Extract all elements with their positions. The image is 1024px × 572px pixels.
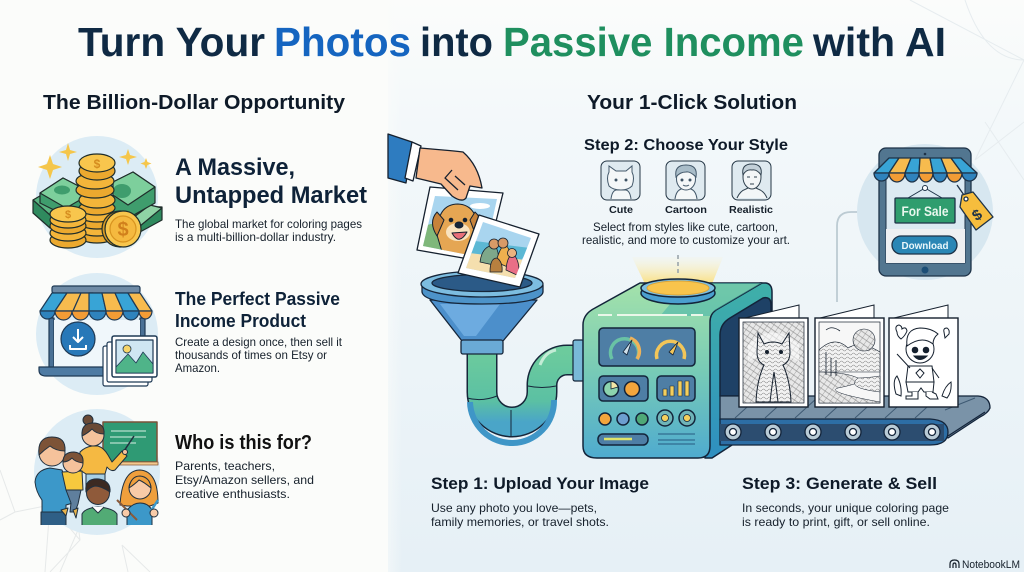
- heading: Your 1-Click Solution: Your 1-Click Solution: [587, 92, 797, 114]
- text: Step 3 Generate and Sell: Step 3: Generate & Sell: [742, 474, 937, 493]
- coloring page: cat: [739, 305, 808, 407]
- coloring page: landscape: [815, 305, 884, 407]
- text: The Perfect Passive Income Product: thousands of times on Etsy or: [175, 348, 327, 362]
- text: The Perfect Passive Income Product: [175, 289, 343, 375]
- text: A Massive, Untapped Market: [175, 154, 367, 244]
- title: [78, 19, 946, 65]
- text: Step 1 Upload Your Image: Step 1: Upload Your Image: [431, 474, 649, 493]
- text: style description: realistic, and more to customize your art.: [582, 233, 790, 247]
- icon: hand holding photos: [388, 134, 539, 287]
- text: Step 1 Upload Your Image: family memories, or travel shots.: [431, 515, 609, 529]
- icon: tablet storefront: For Sale: [902, 204, 949, 219]
- label: Cartoon: Cartoon: [665, 204, 707, 216]
- icon: tablet storefront: [857, 144, 993, 280]
- icon: realistic style: [732, 161, 771, 200]
- icon: storefront laptop with photos: [36, 273, 158, 395]
- text: Step 1 Upload Your Image: Use any photo you love—pets,: [431, 501, 597, 515]
- label: Cute: Cute: [609, 204, 633, 216]
- icon: money and coins: $: [94, 157, 101, 171]
- label: Realistic: Realistic: [729, 204, 773, 216]
- icon: cartoon style: [666, 161, 705, 200]
- heading: Step 2 Choose Your Style: Step 2: Choose Your Style: [584, 137, 788, 154]
- text: Who is this for?: creative enthusiasts.: [175, 487, 290, 501]
- text: A Massive, Untapped Market: is a multi-billion-dollar industry.: [175, 230, 336, 244]
- text: Who is this for?: [175, 432, 314, 501]
- heading: The Billion-Dollar Opportunity: The Billion-Dollar Opportunity: [43, 92, 346, 114]
- text: Step 3 Generate and Sell: [742, 474, 949, 529]
- text: Step 3 Generate and Sell: is ready to print, gift, or sell online.: [742, 515, 930, 529]
- icon: arrow to storefront: [837, 205, 874, 302]
- icon: tablet storefront: $: [969, 206, 986, 225]
- icon: money and coins: $: [117, 219, 129, 241]
- icon: parents, teachers and creatives: [34, 409, 160, 535]
- text: A Massive, Untapped Market: The global market for coloring pages: [175, 217, 362, 231]
- icon: pipe: [467, 340, 584, 443]
- icon: cute style: [601, 161, 640, 200]
- title: Passive Income: [503, 19, 804, 65]
- text: style description: Select from styles like cute, cartoon,: [593, 220, 778, 234]
- icon: funnel: [421, 271, 543, 354]
- icon: light beam and dashed connector: [632, 255, 723, 284]
- text: The Perfect Passive Income Product: Amazon.: [175, 361, 220, 375]
- title: with AI: [812, 19, 946, 65]
- text: A Massive, Untapped Market: Untapped Market: [175, 182, 367, 209]
- text: Step 1 Upload Your Image: [431, 474, 649, 529]
- watermark: NotebookLM: NotebookLM: [962, 559, 1020, 571]
- icon: money and coins: [33, 136, 162, 258]
- title: Turn Your: [78, 19, 265, 65]
- text: Who is this for?: Etsy/Amazon sellers, and: [175, 473, 314, 487]
- text: A Massive, Untapped Market: A Massive,: [175, 154, 295, 181]
- text: The Perfect Passive Income Product: The Perfect Passive: [175, 289, 340, 309]
- icon: tablet storefront: Download: [902, 240, 948, 252]
- text: The Perfect Passive Income Product: Income Product: [175, 311, 306, 331]
- title: into: [420, 19, 493, 65]
- text: style description: [582, 220, 790, 247]
- text: Who is this for?: Parents, teachers,: [175, 459, 275, 473]
- text: Step 3 Generate and Sell: In seconds, your unique coloring page: [742, 501, 949, 515]
- icon: conveyor belt: [720, 396, 990, 445]
- icon: processing machine: [583, 279, 772, 458]
- title: Photos: [274, 19, 411, 65]
- text: Who is this for?: Who is this for?: [175, 432, 312, 454]
- text: The Perfect Passive Income Product: Create a design once, then sell it: [175, 335, 343, 349]
- icon: money and coins: $: [65, 209, 71, 221]
- coloring page: cartoon kid: [889, 305, 958, 407]
